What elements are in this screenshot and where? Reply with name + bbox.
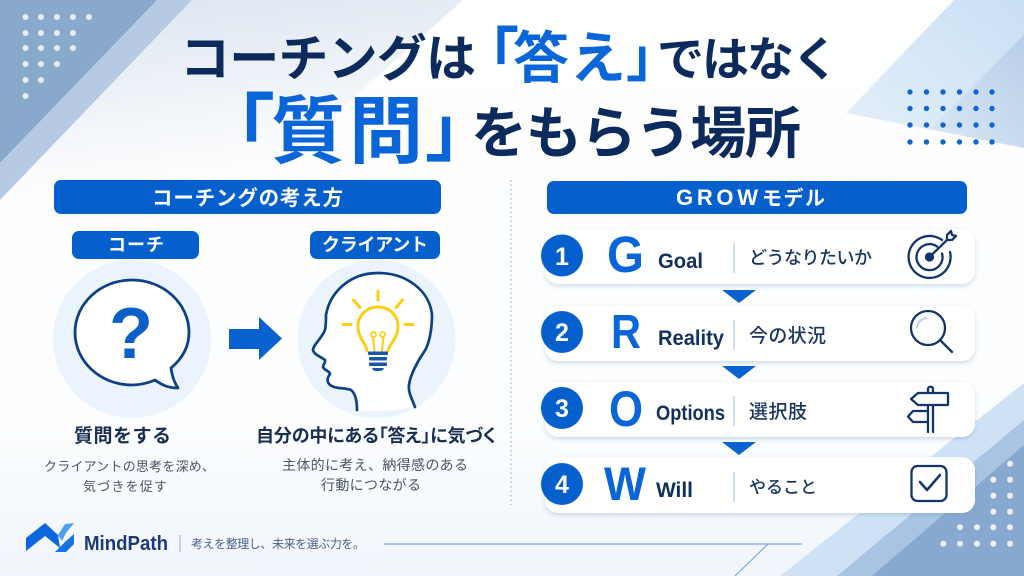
logo: MindPath: MindPath [84,533,168,555]
title: 質問 [271,90,423,173]
step connector arrows [722,290,756,455]
panel: coaching mindset [44,180,496,494]
row 2: Reality: Reality [658,327,724,350]
heading: coaching mindset: コーチングの考え方 [152,186,343,210]
icon: head with light bulb [298,260,456,418]
row 2: Reality: 2 [555,319,569,347]
vertical dotted divider [510,180,512,505]
logo: MindPath: 考えを整理し、未来を選ぶ力を。 [191,537,365,551]
icon: magnifier [911,311,952,352]
row 1: Goal: どうなりたいか [749,248,872,268]
row 3: Options: O [609,381,643,437]
row 2: Reality: R [611,306,641,359]
heading: GROW model: モデル [762,186,825,210]
row 4: Will: Will [656,479,693,502]
row 3: Options [541,381,975,437]
title: 答え [513,27,626,90]
icon: question speech bubble: ? [109,294,153,374]
top-left decoration [0,0,463,200]
title: 」 [626,28,680,88]
client caption [256,425,496,493]
row 4: Will [541,457,975,513]
icon: logo mark [26,523,74,552]
title: 「 [459,23,519,90]
client caption: 主体的に考え、納得感のある [282,457,468,473]
coach caption: 気づきを促す [83,479,167,494]
row 3: Options: Options [656,402,725,425]
panel: GROW model [541,181,975,513]
heading: coaching mindset [54,180,441,214]
client pill: クライアント [322,235,428,255]
row 1: Goal [541,226,975,284]
coach caption: クライアントの思考を深め、 [44,459,215,474]
row 1: Goal: G [607,226,644,283]
title: 」 [425,92,495,170]
top-right decoration [846,0,1024,148]
client caption: 行動につながる [321,477,421,493]
row 2: Reality [541,306,975,361]
row 4: Will: W [604,457,647,510]
row 1: Goal: 1 [555,243,569,271]
row 4: Will: やること [749,478,817,497]
title [180,23,839,175]
arrow [229,317,282,360]
coach pill [72,231,199,259]
row 1: Goal: Goal [658,250,703,273]
row 4: Will: 4 [555,471,569,499]
title: ではなく [657,33,839,86]
coach pill: コーチ [108,235,164,255]
logo: MindPath [26,523,365,555]
row 3: Options: 選択肢 [749,401,807,423]
heading: GROW model [547,181,967,214]
bottom-right decoration [780,383,1024,576]
coach caption: 質問をする [74,425,171,447]
icon: checkbox [912,466,946,501]
title: 「 [197,87,275,175]
client caption: 自分の中にある「答え」に気づく [256,425,496,446]
heading: GROW model: GROW [676,185,758,210]
icon: question speech bubble [53,260,211,418]
client pill [310,231,440,259]
row 2: Reality: 今の状況 [749,325,826,347]
title: をもらう場所 [471,102,801,165]
icon: signpost [908,387,948,432]
coach caption [44,425,215,494]
footer line [384,544,802,576]
row 3: Options: 3 [555,395,569,423]
title: コーチングは [180,31,476,87]
icon: target [909,231,956,278]
